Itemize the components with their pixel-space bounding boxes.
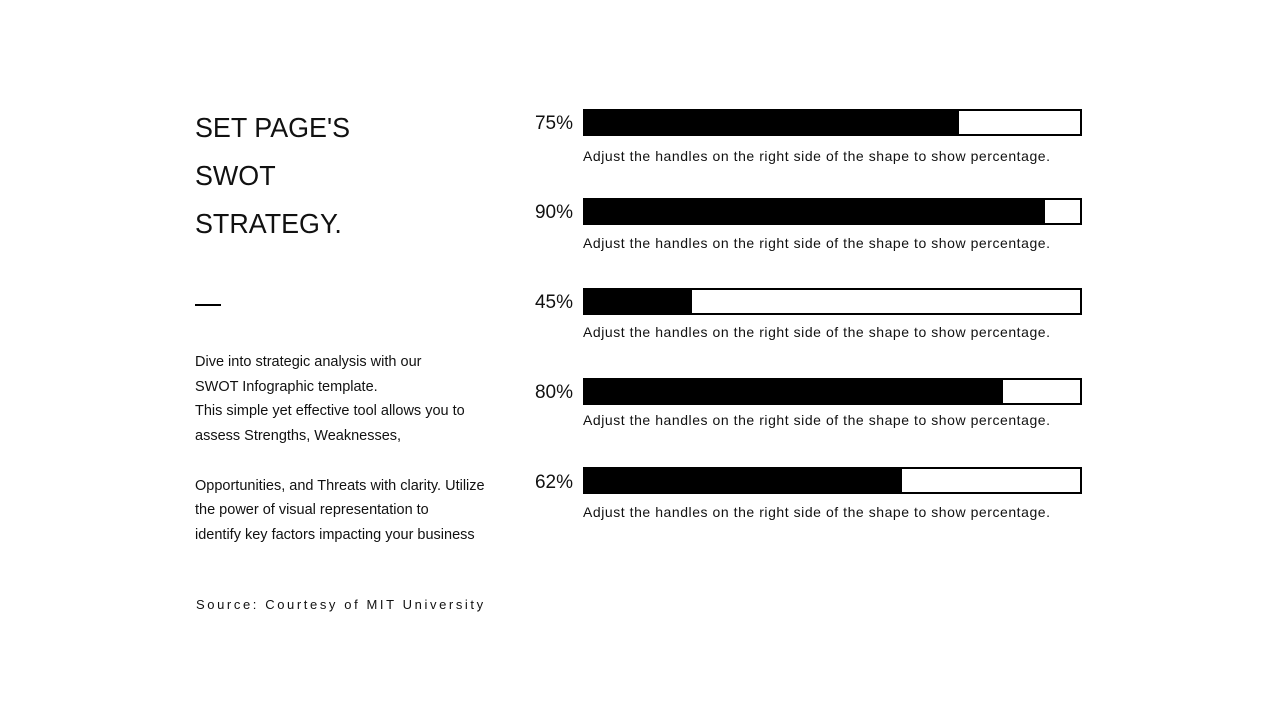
description: This simple yet effective tool allows you to: [195, 403, 465, 419]
title: SET PAGE'S: [195, 112, 350, 143]
source: Source: Courtesy of MIT University: [196, 597, 486, 612]
title: [195, 112, 350, 239]
bar row 5: 62%: [535, 472, 573, 493]
description: Dive into strategic analysis with our: [195, 354, 421, 370]
bar row 3: [535, 288, 1082, 340]
bar row 1: 75%: [535, 113, 573, 134]
description: the power of visual representation to: [195, 502, 429, 518]
title: SWOT: [195, 160, 276, 191]
description: SWOT Infographic template.: [195, 379, 378, 395]
dash: [195, 304, 221, 306]
bar row 4: [535, 378, 1082, 428]
bar row 3: Adjust the handles on the right side of the shape to show percentage.: [583, 324, 1051, 340]
bar row 2: [535, 198, 1082, 251]
bar row 4: Adjust the handles on the right side of the shape to show percentage.: [583, 412, 1051, 428]
bar row 5: [535, 467, 1082, 520]
bar row 2: Adjust the handles on the right side of the shape to show percentage.: [583, 235, 1051, 251]
description: identify key factors impacting your business: [195, 527, 475, 543]
description: assess Strengths, Weaknesses,: [195, 428, 401, 444]
bar row 1: Adjust the handles on the right side of the shape to show percentage.: [583, 148, 1051, 164]
bar row 4: 80%: [535, 382, 573, 403]
description: Opportunities, and Threats with clarity. Utilize: [195, 478, 485, 494]
bar row 3: 45%: [535, 292, 573, 313]
bar row 5: Adjust the handles on the right side of the shape to show percentage.: [583, 504, 1051, 520]
title: STRATEGY.: [195, 208, 342, 239]
bar row 2: 90%: [535, 202, 573, 223]
bar row 1: [535, 109, 1082, 164]
description: [195, 354, 485, 543]
